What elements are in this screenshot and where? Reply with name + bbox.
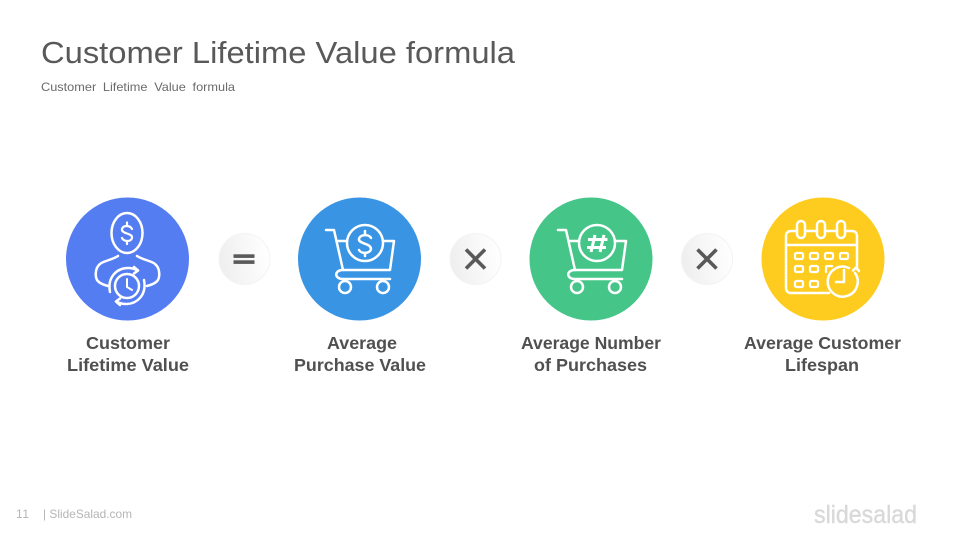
label: average purchase value xyxy=(294,333,426,375)
label: average purchase value: Purchase Value xyxy=(294,355,426,375)
formula term: average customer lifespan xyxy=(744,198,901,375)
label: customer lifetime value: Lifetime Value xyxy=(67,355,189,375)
icon: calendar with clock xyxy=(786,221,859,297)
title: Customer Lifetime Value formula xyxy=(41,35,516,70)
subtitle: Customer Lifetime Value formula xyxy=(41,80,235,94)
formula term: average number of purchases xyxy=(521,198,661,375)
label: average number of purchases: Average Number xyxy=(521,333,661,353)
label: average customer lifespan: Average Customer xyxy=(744,333,901,353)
icon: cart with dollar xyxy=(326,225,394,293)
formula term: customer lifetime value xyxy=(66,198,189,375)
label: average number of purchases xyxy=(521,333,661,375)
label: average number of purchases: of Purchases xyxy=(534,355,647,375)
circle: average purchase value xyxy=(298,198,421,320)
label: average customer lifespan xyxy=(744,333,901,375)
logo wordmark: slidesalad xyxy=(814,501,917,529)
operator: equals xyxy=(219,234,270,284)
formula term: average purchase value xyxy=(294,198,426,375)
circle: average number of purchases xyxy=(530,198,652,320)
label: customer lifetime value xyxy=(67,333,189,375)
circle: customer lifetime value xyxy=(66,198,189,320)
icon: cart with hash xyxy=(558,225,626,293)
label: customer lifetime value: Customer xyxy=(86,333,170,353)
operator: multiply xyxy=(682,234,732,284)
circle: average customer lifespan xyxy=(762,198,884,320)
label: average purchase value: Average xyxy=(327,333,397,353)
icon: person with dollar head and clock xyxy=(96,213,159,305)
page number: 11 xyxy=(16,507,29,521)
footer site name: | SlideSalad.com xyxy=(43,507,132,521)
label: average customer lifespan: Lifespan xyxy=(785,355,859,375)
operator: multiply xyxy=(450,234,501,284)
